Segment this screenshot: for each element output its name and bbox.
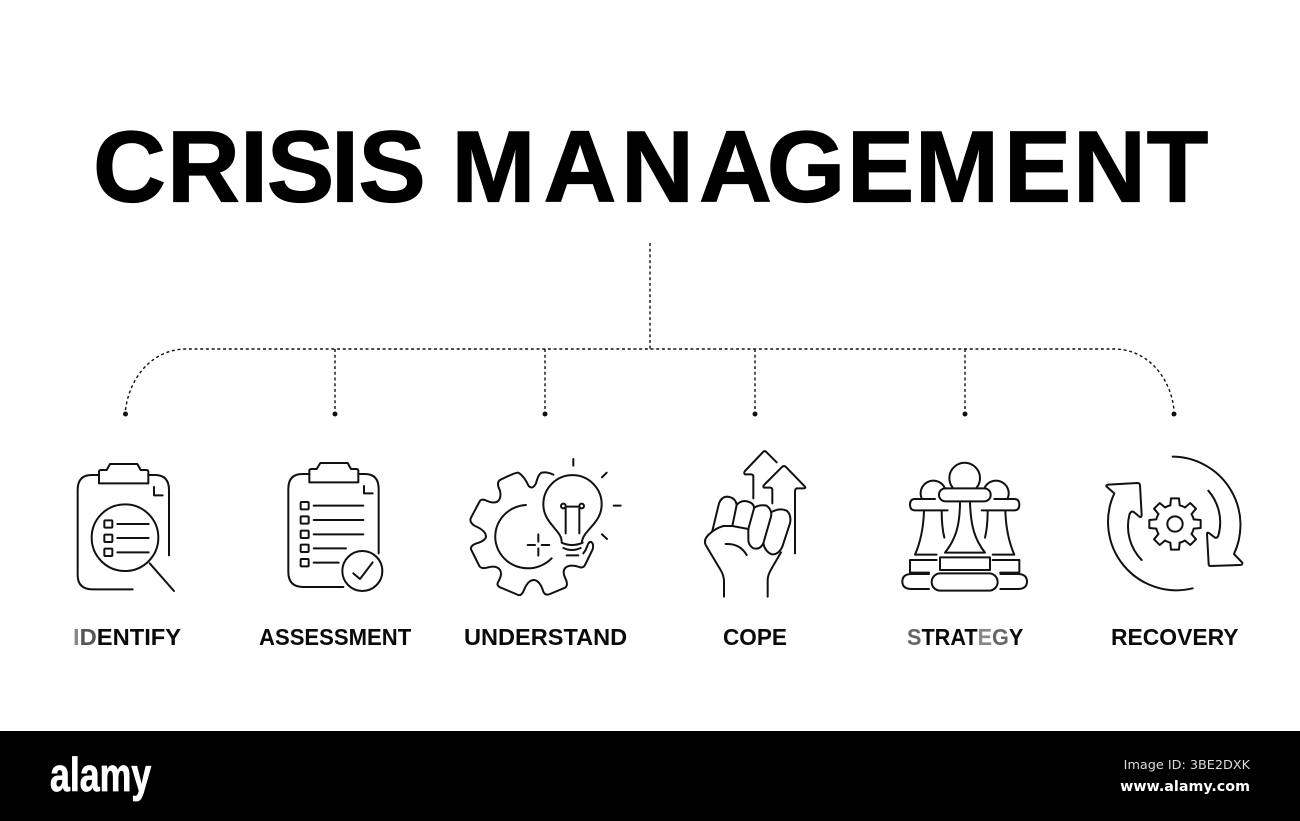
icon: gear with light bulb xyxy=(470,459,621,595)
icon: checklist clipboard xyxy=(288,463,382,591)
icon: clipboard with magnifier xyxy=(78,464,174,591)
label: understand: UNDERSTAND xyxy=(464,624,627,650)
website: www.alamy.com xyxy=(1120,779,1250,795)
image id: Image ID: 3BE2DXK xyxy=(1124,758,1251,773)
connector tree xyxy=(123,243,1176,416)
icon: recovery arrows with gear xyxy=(1106,457,1242,590)
footer logo: alamy xyxy=(50,748,151,801)
footer bar xyxy=(0,731,1300,821)
label: cope: COPE xyxy=(723,624,787,650)
label: assessment: ASSESSMENT xyxy=(259,625,411,650)
icon: chess pawns xyxy=(902,463,1027,591)
title: CRISIS MANAGEMENT xyxy=(93,112,1208,224)
label: identify: IDENTIFY xyxy=(73,624,182,650)
label: recovery: RECOVERY xyxy=(1111,624,1239,650)
icon: raised fist with arrows xyxy=(705,451,805,597)
label: strategy: STRATEGY xyxy=(907,624,1023,650)
